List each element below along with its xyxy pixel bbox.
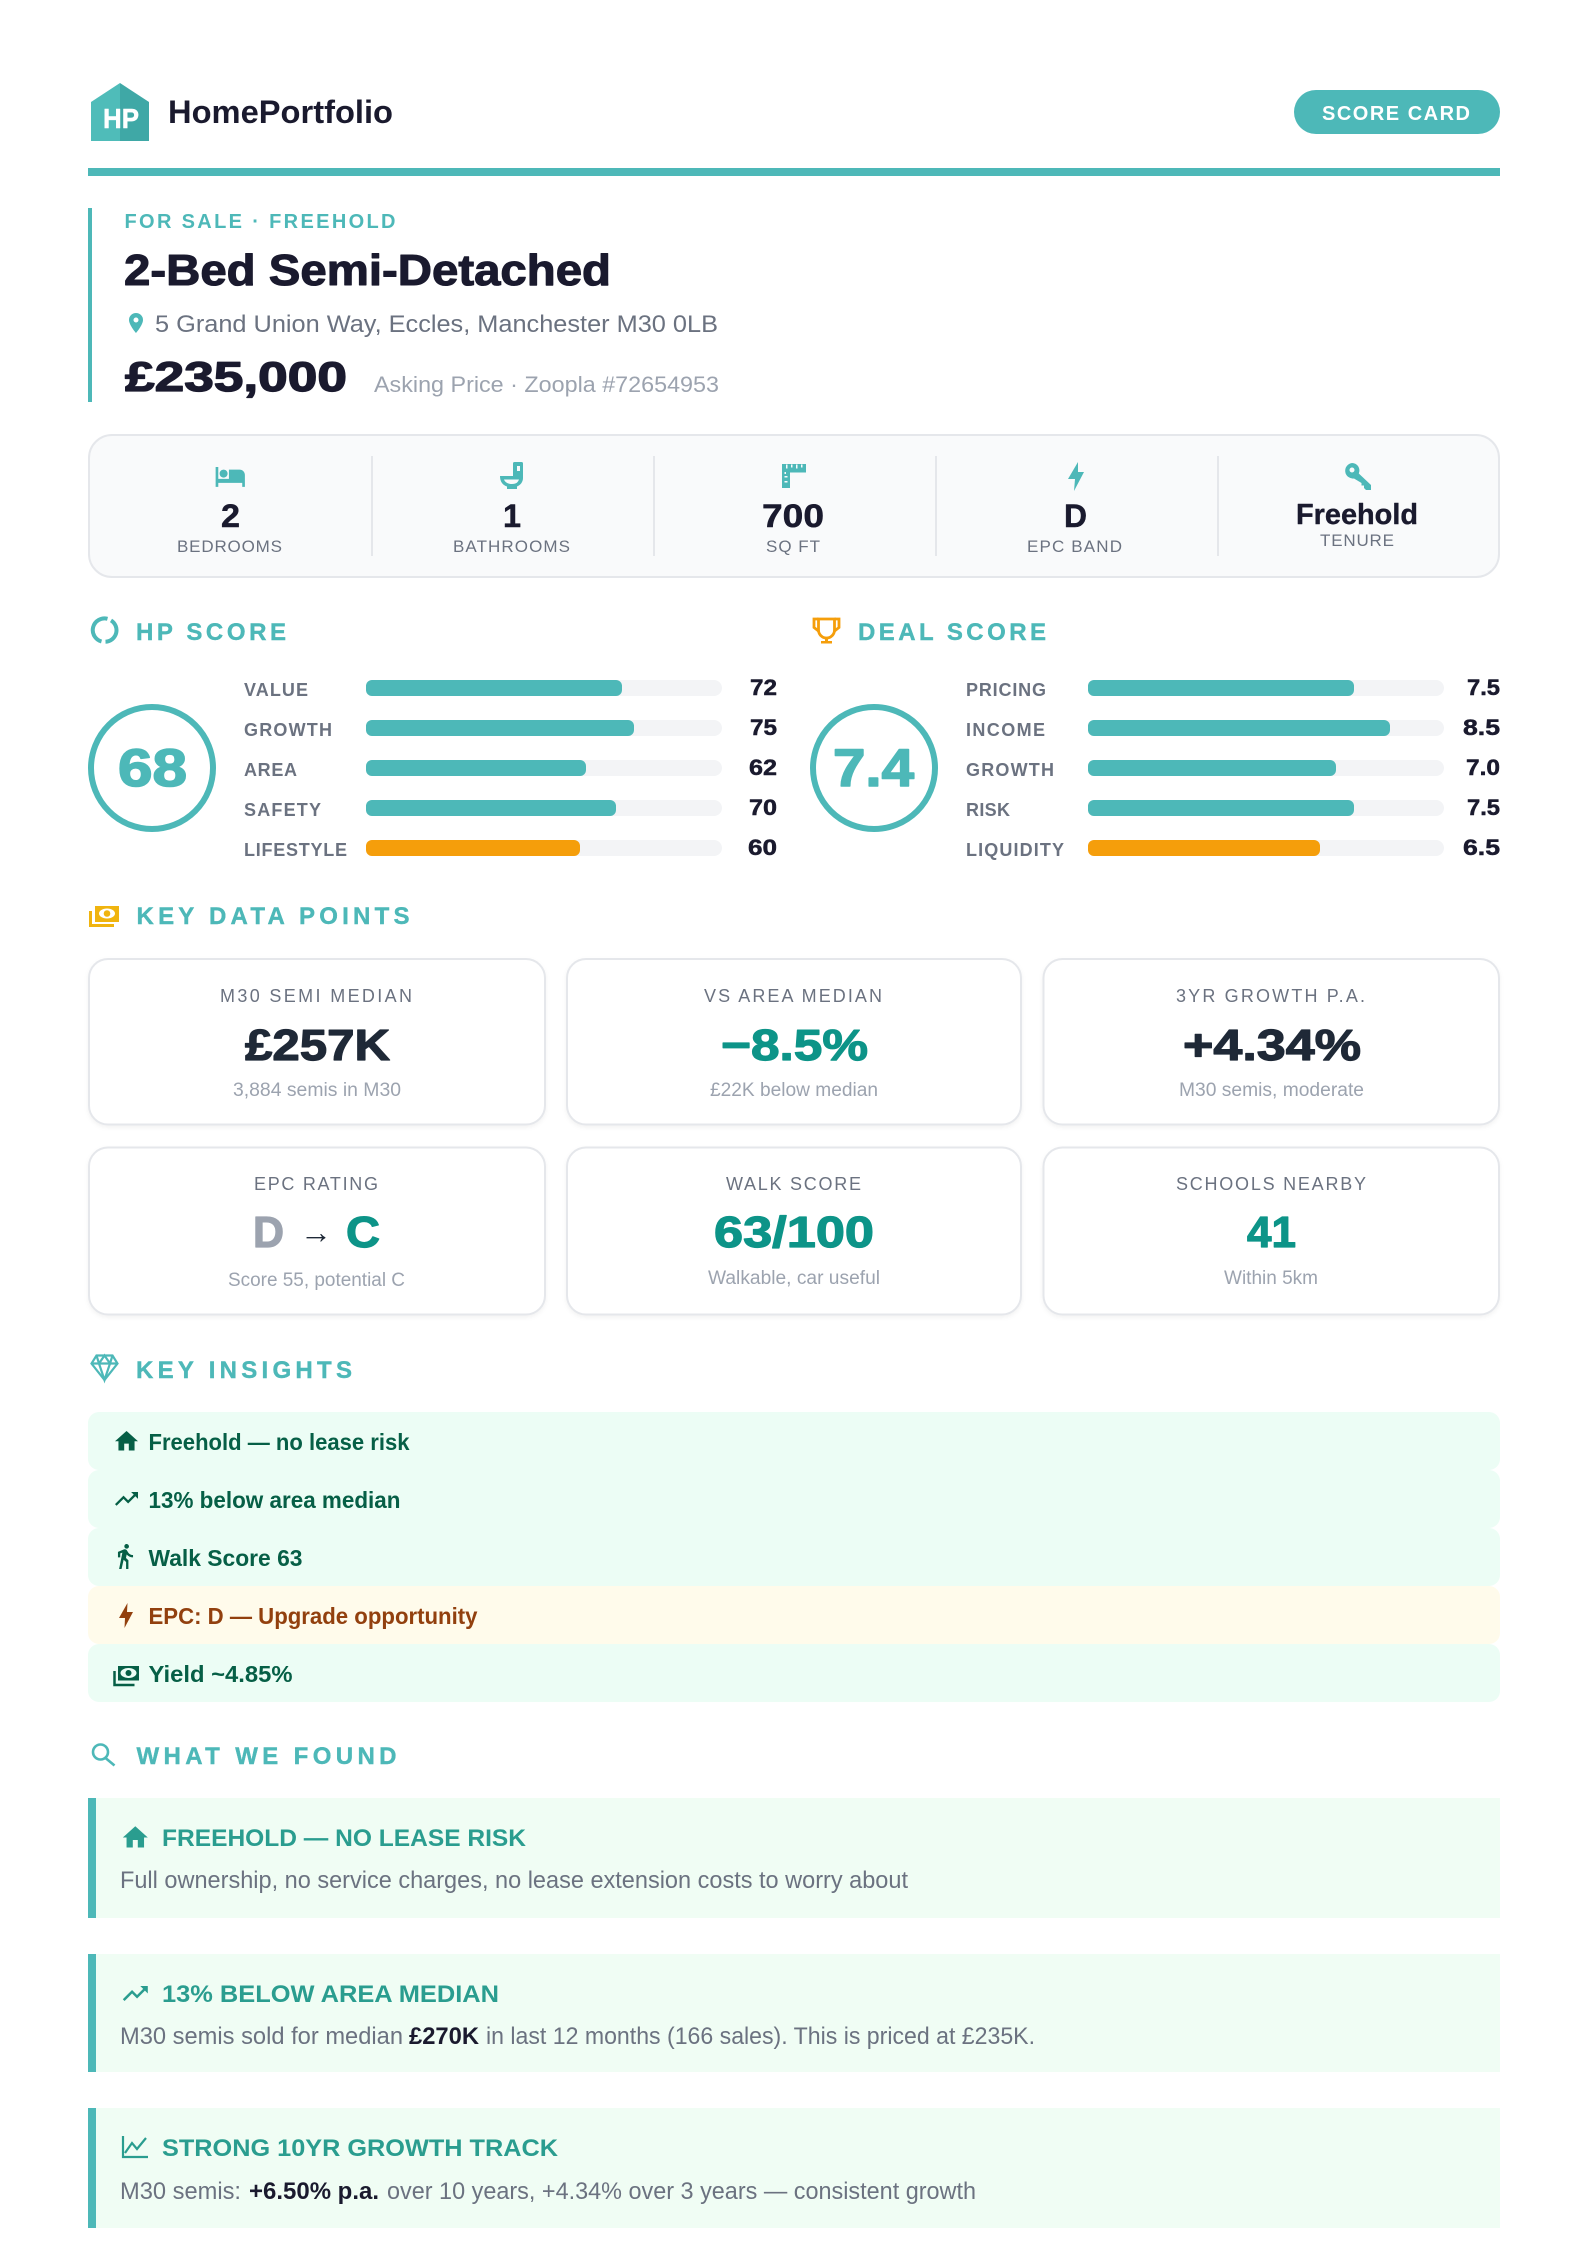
card: schools nearby: SCHOOLS NEARBY: [1176, 1174, 1366, 1194]
icon: location pin: [129, 313, 143, 333]
card: vs area median: [567, 959, 1021, 1124]
finding: growth track: STRONG 10YR GROWTH TRACK: [162, 2135, 559, 2162]
card: M30 semi median: M30 SEMI MEDIAN: [220, 986, 412, 1006]
insight: below median: 13% below area median: [148, 1487, 400, 1513]
score bar: pricing: [966, 675, 1500, 700]
card: 3yr growth: M30 semis, moderate: [1179, 1080, 1364, 1101]
icon: HomePortfolio logo: [91, 83, 149, 141]
card: 3yr growth: 3YR GROWTH P.A.: [1176, 986, 1365, 1006]
score bar: safety: [244, 795, 777, 820]
card: vs area median: VS AREA MEDIAN: [704, 986, 882, 1006]
stat: tenure: [1296, 463, 1418, 550]
stat: bathrooms: BATHROOMS: [453, 537, 570, 556]
stat: EPC band: EPC BAND: [1027, 537, 1122, 556]
card: EPC rating: EPC RATING: [254, 1174, 378, 1194]
card: EPC rating: C: [346, 1208, 380, 1257]
card: EPC rating: Score 55, potential C: [228, 1270, 405, 1291]
badge: score card: SCORE CARD: [1322, 103, 1470, 125]
icon: HomePortfolio logo: HP: [103, 103, 139, 134]
score bar: value: [244, 675, 777, 700]
price: £235,000: [125, 353, 347, 400]
panel: HP score: [91, 618, 777, 860]
score bar: area: AREA: [244, 760, 297, 780]
stat: bedrooms: BEDROOMS: [177, 537, 282, 556]
insight: walk score: Walk Score 63: [148, 1545, 302, 1571]
insight: walk score: [88, 1528, 1500, 1586]
stat: tenure: Freehold: [1296, 499, 1418, 531]
score bar: liquidity: [966, 835, 1500, 860]
finding: growth track: M30 semis:: [120, 2178, 241, 2205]
finding: growth track: over 10 years, +4.34% over 3 years — consistent growth: [387, 2178, 976, 2205]
panel: key insights list: [88, 1412, 1500, 1702]
finding: below median: 13% BELOW AREA MEDIAN: [162, 1981, 499, 2008]
card: vs area median: −8.5%: [721, 1021, 868, 1070]
card: EPC rating: [89, 1148, 545, 1314]
card: walk score: 63/100: [714, 1208, 874, 1257]
score bar: risk: RISK: [966, 800, 1010, 820]
insight: yield: [88, 1644, 1500, 1702]
finding: freehold: FREEHOLD — NO LEASE RISK: [162, 1825, 527, 1852]
stat: tenure: TENURE: [1320, 531, 1394, 550]
score bar: pricing: 7.5: [1467, 675, 1500, 700]
header: [91, 83, 1500, 141]
score bar: value: VALUE: [244, 680, 308, 700]
score ring: 68: [91, 707, 213, 829]
score bar: income: 8.5: [1463, 715, 1500, 740]
panel: property hero: [88, 208, 719, 402]
card: walk score: Walkable, car useful: [708, 1268, 880, 1289]
score bar: area: 62: [749, 755, 777, 780]
panel: deal score: [813, 619, 1500, 860]
stat: bathrooms: [453, 462, 570, 556]
stat: square feet: SQ FT: [766, 537, 820, 556]
price note: Asking Price · Zoopla #72654953: [374, 372, 719, 397]
score bar: income: INCOME: [966, 720, 1045, 740]
stat: EPC band: [1027, 462, 1122, 556]
insight: freehold: Freehold — no lease risk: [148, 1429, 410, 1455]
finding: growth track: [88, 2108, 1500, 2228]
panel: key data cards: [89, 959, 1499, 1314]
stat: square feet: [762, 464, 824, 556]
score bar: income: [966, 715, 1500, 740]
card: schools nearby: 41: [1247, 1208, 1296, 1257]
badge: score card: [1294, 90, 1500, 134]
score bar: growth: GROWTH: [966, 760, 1054, 780]
score bar: liquidity: LIQUIDITY: [966, 840, 1064, 860]
card: EPC rating: →: [300, 1214, 332, 1250]
stat: EPC band: D: [1064, 498, 1087, 534]
finding: below median: £270K: [409, 2023, 480, 2050]
card: M30 semi median: 3,884 semis in M30: [233, 1080, 401, 1101]
heading: what we found: WHAT WE FOUND: [136, 1743, 396, 1770]
score bar: growth: GROWTH: [244, 720, 332, 740]
score bar: lifestyle: 60: [748, 835, 777, 860]
score bar: growth: [966, 755, 1500, 780]
insight: EPC upgrade: EPC: D — Upgrade opportunity: [148, 1603, 478, 1629]
score bar: lifestyle: LIFESTYLE: [244, 840, 347, 860]
score bar: risk: [966, 795, 1500, 820]
panel: property stats: [89, 435, 1499, 577]
stat: bedrooms: [177, 467, 282, 556]
brand name: HomePortfolio: [168, 94, 393, 130]
card: vs area median: £22K below median: [710, 1080, 878, 1101]
score bar: risk: 7.5: [1467, 795, 1500, 820]
panel: what we found cards: [88, 1798, 1500, 2228]
score bar: growth: 75: [750, 715, 777, 740]
finding: below median: in last 12 months (166 sales). This is priced at £235K.: [486, 2023, 1035, 2050]
stat: bathrooms: 1: [503, 498, 521, 534]
card: schools nearby: Within 5km: [1224, 1268, 1318, 1289]
stat: square feet: 700: [762, 498, 824, 534]
card: M30 semi median: £257K: [245, 1021, 390, 1070]
finding: below median: [88, 1954, 1500, 2072]
score bar: area: [244, 755, 777, 780]
card: walk score: [567, 1148, 1021, 1314]
score ring: 68: 68: [118, 739, 187, 798]
score bar: growth: 7.0: [1466, 755, 1500, 780]
score bar: value: 72: [750, 675, 777, 700]
heading: key insights: KEY INSIGHTS: [136, 1357, 352, 1384]
finding: growth track: +6.50% p.a.: [249, 2178, 379, 2205]
score ring: 7.4: [813, 707, 935, 829]
card: 3yr growth: [1044, 959, 1499, 1124]
card: EPC rating: D: [253, 1208, 284, 1257]
eyebrow: FOR SALE · FREEHOLD: [124, 211, 396, 233]
card: walk score: WALK SCORE: [726, 1174, 861, 1194]
finding: freehold: [88, 1798, 1500, 1918]
insight: EPC upgrade: [88, 1586, 1500, 1644]
score bar: safety: SAFETY: [244, 800, 321, 820]
insight: freehold: [88, 1412, 1500, 1470]
card: M30 semi median: [89, 959, 545, 1124]
stat: bedrooms: 2: [221, 498, 240, 534]
property title: 2-Bed Semi-Detached: [124, 246, 611, 295]
score ring: 7.4: 7.4: [833, 739, 915, 798]
finding: freehold: Full ownership, no service charges, no lease extension costs to worry about: [120, 1867, 908, 1894]
heading: deal score: DEAL SCORE: [858, 619, 1046, 646]
insight: below median: [88, 1470, 1500, 1528]
score bar: growth: [244, 715, 777, 740]
score bar: pricing: PRICING: [966, 680, 1046, 700]
heading: HP score: HP SCORE: [136, 619, 286, 646]
card: 3yr growth: +4.34%: [1183, 1021, 1361, 1070]
finding: below median: M30 semis sold for median: [120, 2023, 403, 2050]
score bar: liquidity: 6.5: [1463, 835, 1500, 860]
card: schools nearby: [1044, 1148, 1499, 1314]
score bar: lifestyle: [244, 835, 777, 860]
heading: key data points: KEY DATA POINTS: [136, 903, 410, 930]
score bar: safety: 70: [749, 795, 777, 820]
address: 5 Grand Union Way, Eccles, Manchester M30 0LB: [155, 311, 718, 338]
insight: yield: Yield ~4.85%: [148, 1661, 292, 1687]
